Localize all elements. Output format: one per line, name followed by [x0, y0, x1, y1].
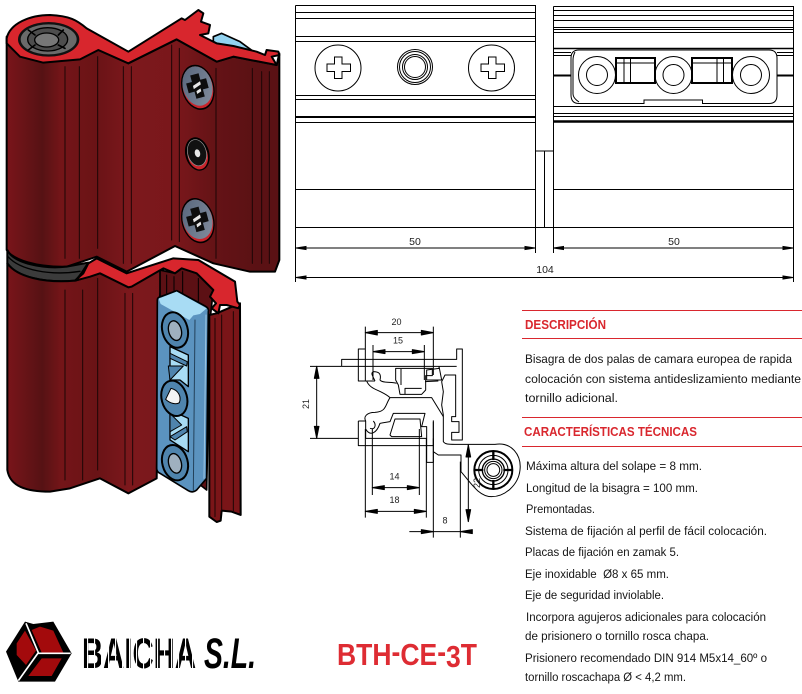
title: model code: 3 — [446, 639, 461, 674]
specifications list: Sistema de fijación al perfil de fácil colocación. — [525, 524, 767, 538]
dimensions — [310, 327, 472, 538]
section labels: 21 — [301, 399, 311, 409]
knuckle ring — [7, 250, 88, 281]
section labels: 8 — [442, 516, 448, 526]
title: model code: CE — [400, 637, 437, 672]
hinge pin section — [474, 451, 512, 489]
screw right — [468, 45, 514, 91]
specifications list: Eje de seguridad inviolable. — [525, 588, 664, 602]
right view: inner leaf — [554, 6, 794, 282]
hinge pin head — [18, 22, 79, 57]
recess behind plate — [160, 268, 213, 490]
title: model code: - — [437, 634, 446, 669]
blue fixing plate — [157, 291, 209, 492]
title: model code: BTH — [337, 637, 401, 672]
label: 50 left: 50 — [409, 236, 421, 248]
section labels — [301, 317, 482, 526]
dimension 50 left — [296, 246, 535, 250]
screw middle — [181, 134, 213, 174]
label: 50 right: 50 — [668, 236, 680, 248]
description text: colocación con sistema antideslizamiento mediante — [525, 372, 801, 386]
specifications list — [525, 459, 767, 684]
title: model code: T — [461, 637, 477, 672]
section labels: 15 — [393, 336, 403, 346]
specifications list: Incorpora agujeros adicionales para colocación — [526, 610, 766, 624]
centre pin — [398, 50, 432, 84]
section labels: 18 — [389, 495, 400, 505]
specifications list: Eje inoxidable Ø8 x 65 mm. — [525, 567, 669, 581]
label: 104: 104 — [536, 264, 554, 276]
logo wordmark: S.L. — [204, 630, 256, 678]
specifications list: Máxima altura del solape = 8 mm. — [526, 459, 702, 473]
screw top — [176, 61, 220, 114]
description text: tornillo adicional. — [525, 391, 618, 405]
plate hole middle with cone — [157, 378, 191, 419]
plate windows — [170, 347, 188, 387]
specifications list: Prisionero recomendado DIN 914 M5x14_60º o — [525, 651, 767, 665]
section labels: 20 — [391, 317, 402, 327]
lower hinge leaf — [7, 250, 241, 522]
right fin — [209, 303, 241, 522]
screw left — [315, 45, 361, 91]
specifications list: de prisionero o tornillo rosca chapa. — [525, 629, 709, 643]
dimension 50 right — [554, 246, 793, 250]
profile outline — [342, 349, 520, 497]
left view: outer leaf — [296, 6, 536, 282]
joint between views — [295, 151, 794, 228]
upper nut — [396, 368, 432, 394]
technical drawing: cross section — [310, 327, 520, 538]
logo wordmark: BAICHA — [82, 630, 196, 678]
section labels: 14 — [389, 472, 400, 482]
dimension 104 — [296, 276, 793, 279]
red section cap — [7, 10, 279, 65]
plate outline — [571, 50, 777, 104]
description text — [525, 352, 801, 405]
red lower section cap — [75, 258, 240, 313]
specifications list: Placas de fijación en zamak 5. — [525, 545, 679, 559]
specifications list: Premontadas. — [526, 502, 595, 516]
panel: descripción — [522, 310, 802, 405]
specifications list: Longitud de la bisagra = 100 mm. — [526, 481, 698, 495]
illustration: 3D hinge — [7, 10, 279, 522]
description text: Bisagra de dos palas de camara europea de rapida — [525, 352, 792, 366]
lower nut and rail — [358, 413, 433, 446]
title: model code: - — [392, 634, 400, 669]
specifications list: tornillo roscachapa Ø < 4,2 mm. — [525, 670, 686, 684]
technical drawing: front views — [295, 6, 794, 282]
upper hinge leaf — [7, 10, 279, 272]
screw bottom — [176, 194, 220, 247]
panel: características técnicas — [522, 418, 802, 684]
upper body — [7, 37, 279, 272]
heading: características técnicas: CARACTERÍSTICAS TÉCNICAS — [524, 424, 697, 439]
plate hole bottom — [158, 442, 192, 483]
plate hole top — [158, 309, 192, 351]
logo: Baicha S.L. — [6, 622, 256, 682]
icon: cube — [6, 622, 72, 682]
heading: descripción: DESCRIPCIÓN — [525, 317, 606, 332]
section labels: 22 — [472, 478, 482, 488]
lower body — [7, 263, 163, 493]
blue gasket — [213, 33, 255, 53]
